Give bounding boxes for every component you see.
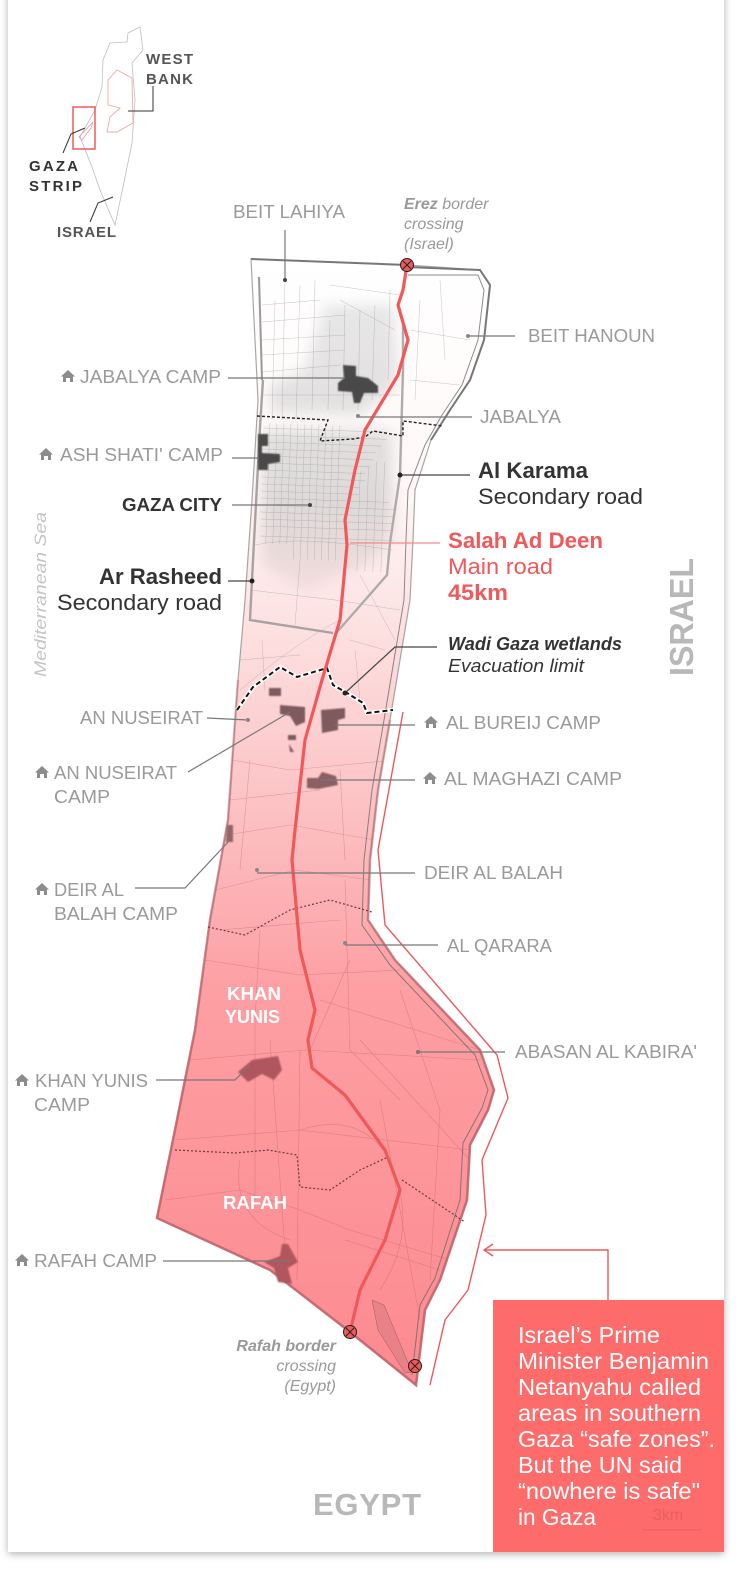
Al Maghazi Camp: AL MAGHAZI CAMP [444,769,622,789]
Egypt: EGYPT [313,1487,421,1522]
Gaza Strip map [157,258,494,1385]
Al Bureij Camp: AL BUREIJ CAMP [446,713,601,733]
Al Karama: Al Karama [478,458,589,483]
An Nuseirat Camp: AN NUSEIRAT [54,763,177,783]
inset locator map: STRIP [29,178,82,195]
place labels: CAMP [54,787,110,807]
Al Bureij camp [321,708,345,733]
Gaza City street grid [259,423,397,573]
Beit Hanoun: BEIT HANOUN [528,326,655,346]
callout text: Gaza “safe zones”. [518,1426,715,1452]
territory fill and border [157,259,494,1385]
An Nuseirat: AN NUSEIRAT [80,708,203,728]
place labels [31,196,700,1522]
place labels: crossing [404,216,464,233]
Nuseirat camps [269,688,305,752]
Deir Al Balah: DEIR AL BALAH [424,863,563,883]
airport area [372,1300,412,1373]
Mediterranean Sea: Mediterranean Sea [31,512,50,677]
safe zone red outline [378,712,508,1385]
Rafah crossing marker [344,1326,356,1338]
Khan Yunis camp [238,1056,282,1082]
Erez border crossing: Erez border [404,196,489,213]
Beit Lahiya: BEIT LAHIYA [233,202,345,222]
refugee camp home icons [15,370,438,1266]
Al Karama road [337,320,403,632]
callout text: But the UN said [518,1452,682,1478]
Israel large vertical: ISRAEL [663,558,700,676]
callout text: Netanyahu called [518,1374,701,1400]
Salah Ad Deen main road [292,265,408,1332]
red locator rectangle [73,107,95,149]
scale bar: 3km [653,1507,683,1524]
Abasan Al Kabira: ABASAN AL KABIRA' [515,1042,697,1062]
callout text: “nowhere is safe" [518,1478,700,1504]
place labels: Secondary road [478,484,643,509]
road network south [165,760,480,1320]
Gaza City: GAZA CITY [122,495,222,515]
Ash Shati camp [258,434,280,470]
Khan Yunis city: KHAN [227,984,281,1004]
Rafah city: RAFAH [223,1193,287,1213]
Gaza outline small [79,122,93,140]
road network north [240,541,400,700]
Gaza Strip label: GAZA [29,158,78,175]
place labels: CAMP [34,1095,90,1115]
north border emphasis [251,259,490,440]
Khan Yunis Camp: KHAN YUNIS [35,1071,148,1091]
place labels: BALAH CAMP [54,904,178,924]
Wadi Gaza wetlands: Wadi Gaza wetlands [448,634,622,654]
inset locator map: BANK [146,71,193,88]
place labels: (Israel) [404,236,454,253]
callout text: in Gaza [518,1504,596,1530]
place labels: Main road [448,554,553,579]
Ar Rasheed road [250,380,333,633]
leader lines [135,230,515,1261]
Rafah Camp: RAFAH CAMP [34,1251,157,1271]
Rafah border crossing: Rafah border [236,1338,337,1355]
Wadi Gaza evacuation limit [237,667,393,713]
Al Qarara: AL QARARA [447,936,552,956]
Erez crossing marker [400,258,414,272]
place labels: Secondary road [57,590,222,615]
place labels: YUNIS [225,1007,280,1027]
callout text: Israel’s Prime [518,1322,660,1348]
Al Maghazi camp [307,772,338,789]
south border emphasis [157,680,494,1385]
Jabalya refugee camp [338,365,378,403]
southern dashed boundaries [175,900,465,1222]
Deir Al Balah camp [226,825,233,842]
south crossing marker [408,1360,422,1372]
inner parallel border road [362,275,488,1375]
place labels: Evacuation limit [448,656,585,676]
place labels: crossing [276,1358,336,1375]
callout text: areas in southern [518,1400,701,1426]
north evacuation line [257,416,443,441]
Salah Ad Deen: Salah Ad Deen [448,528,603,553]
inset locator map [29,27,193,241]
Deir Al Balah Camp: DEIR AL [54,880,124,900]
place labels: (Egypt) [284,1378,336,1395]
Ash Shati camp: ASH SHATI' CAMP [60,445,223,465]
callout text: Minister Benjamin [518,1348,709,1374]
Israel small label: ISRAEL [57,224,116,241]
urban density areas [165,275,488,1375]
callout text [518,1322,715,1530]
callout box [493,1300,724,1552]
inset leader lines [63,86,153,222]
Israel outline [80,27,143,225]
scale bar [642,1507,702,1530]
Jabalya and Beit Lahiya streets [262,280,470,420]
callout arrow [484,1244,608,1300]
West Bank outline [107,70,133,132]
place labels: 45km [448,580,508,605]
Rafah camp [264,1244,298,1284]
Jabalya Camp: JABALYA CAMP [80,367,221,387]
Ar Rasheed: Ar Rasheed [99,564,222,589]
West Bank label: WEST [146,51,193,68]
Jabalya: JABALYA [480,407,561,427]
